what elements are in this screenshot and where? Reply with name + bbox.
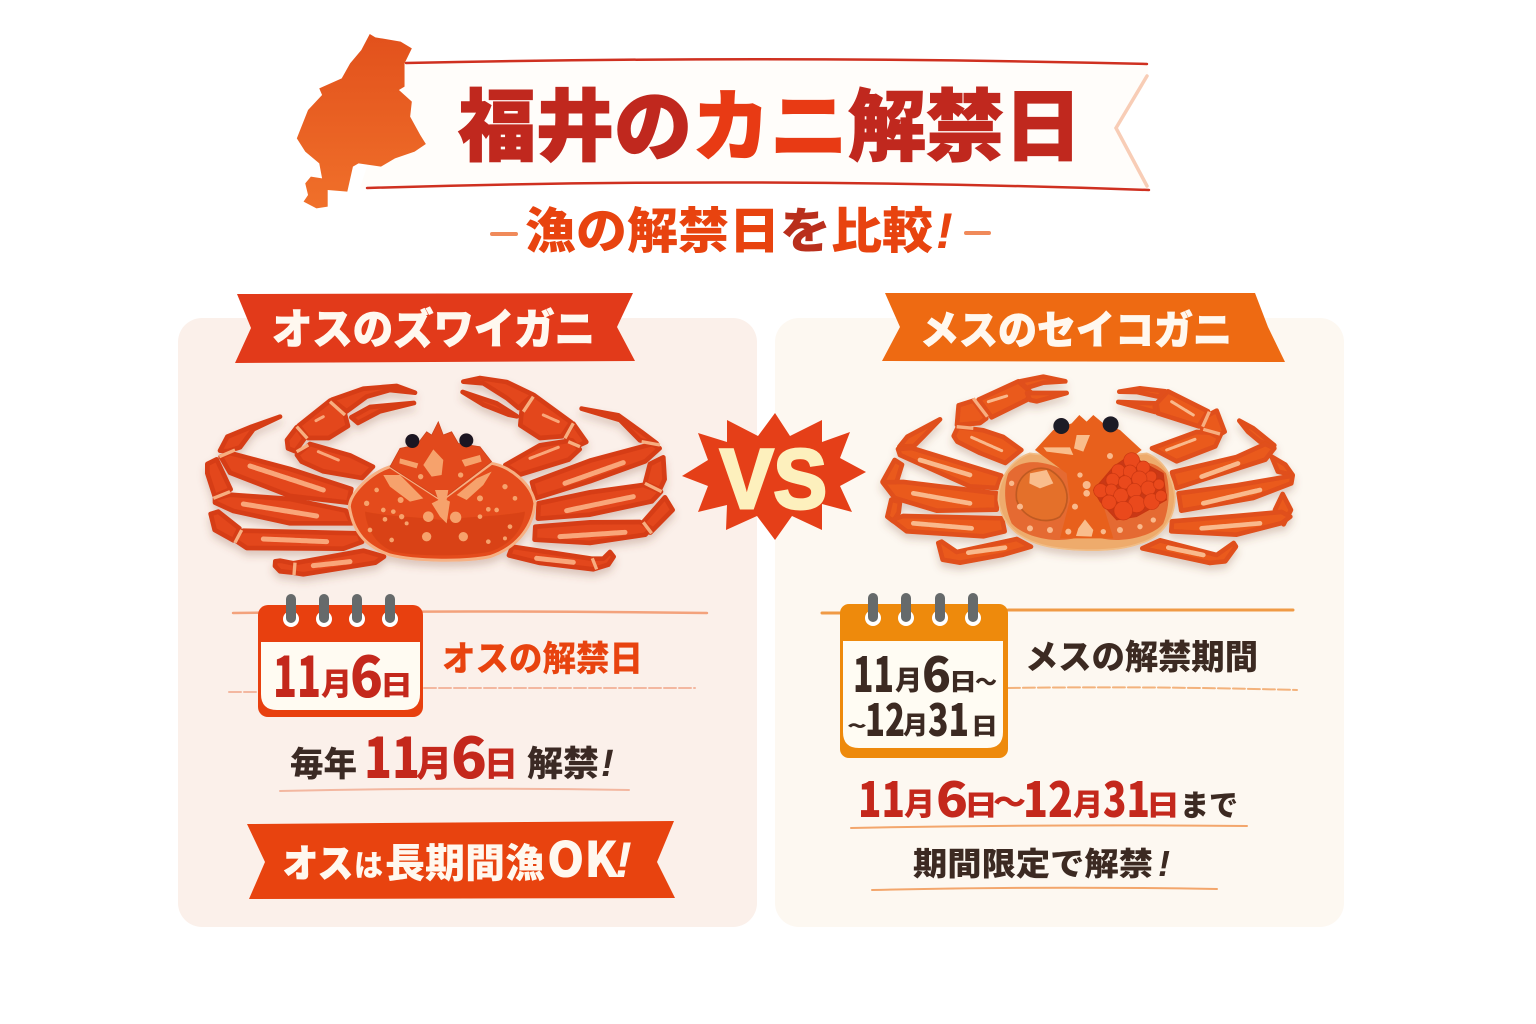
panel: female seiko crab: [775, 318, 1344, 927]
male calendar date: 11: [273, 633, 321, 714]
ribbon: female heading: メスのセイコガニ: [920, 298, 1232, 356]
male date statement: 毎年: [290, 737, 357, 786]
male crab shell: [349, 463, 535, 560]
female date statement: 日: [1146, 784, 1180, 824]
ribbon: male callout: 長期間漁: [385, 831, 545, 889]
male date statement: !: [601, 743, 614, 785]
icon: female calendar: [840, 598, 1008, 758]
female calendar dates: 11: [853, 636, 894, 706]
female calendar dates: ~: [847, 709, 867, 741]
female date label: メスの解禁期間: [1025, 630, 1258, 679]
female calendar dates: [847, 636, 998, 749]
male calendar date: 日: [380, 664, 413, 703]
female date statement: 6: [936, 761, 968, 831]
illustration: male crab: [207, 378, 673, 575]
female crab eyes: [1053, 416, 1119, 434]
male calendar date: 月: [321, 659, 352, 704]
ribbon: male callout: オス: [283, 833, 353, 888]
title banner: [360, 59, 1149, 190]
female date statement: 11: [858, 761, 905, 831]
male crab eyes: [405, 433, 473, 448]
female calendar dates: 日: [971, 707, 998, 741]
ribbon: male heading: オスのズワイガニ: [272, 296, 595, 357]
title: 福井のカニ解禁日: [458, 65, 1082, 177]
female closing statement: 期間限定で解禁: [913, 839, 1153, 885]
female date statement: 月: [1073, 780, 1103, 824]
icon: Fukui map: [297, 34, 426, 208]
male calendar date: 6: [350, 633, 383, 714]
female crab shell: [998, 453, 1175, 550]
male calendar date: [273, 633, 413, 714]
subtitle: !: [936, 203, 953, 259]
VS starburst: VS: [720, 432, 827, 526]
male date statement: 日: [484, 737, 518, 786]
panel: male snow crab: [178, 318, 757, 927]
female calendar dates: 12: [865, 685, 905, 749]
VS starburst: [682, 413, 866, 540]
illustration: female crab: [883, 377, 1293, 563]
subtitle: 漁の解禁日を比較: [525, 192, 933, 263]
female date lines: [822, 610, 1297, 690]
ribbon: male callout: OK: [547, 821, 619, 892]
male date statement: 月: [416, 735, 452, 787]
male date label: オスの解禁日: [442, 631, 643, 682]
female date statement: 月: [904, 779, 935, 824]
roe cluster: [1093, 453, 1167, 520]
ribbon: male callout: は: [354, 841, 383, 885]
ribbon: male callout: [247, 821, 675, 899]
male date statement: 解禁: [527, 736, 599, 787]
female calendar dates: 6: [922, 636, 951, 706]
female date statement: 日: [964, 784, 998, 824]
female date statement: [851, 761, 1247, 831]
female calendar dates: 31: [928, 685, 969, 749]
female date statement: ～: [993, 778, 1026, 822]
icon: male calendar: [258, 599, 423, 717]
male date statement: 6: [451, 714, 487, 795]
female closing statement: [872, 839, 1217, 890]
female calendar dates: 日: [949, 662, 977, 697]
male date lines: [229, 612, 707, 692]
male date statement: [280, 714, 629, 795]
female date statement: まで: [1180, 781, 1238, 825]
female calendar dates: 月: [903, 706, 928, 742]
male date statement: 11: [364, 714, 420, 795]
ribbon: male callout: !: [615, 832, 632, 888]
female closing statement: !: [1158, 843, 1170, 884]
female calendar dates: ～: [975, 665, 997, 697]
female calendar dates: 月: [895, 659, 922, 698]
ribbon: female heading: [882, 293, 1285, 362]
female date statement: 31: [1103, 761, 1150, 831]
female date statement: 12: [1023, 761, 1073, 831]
